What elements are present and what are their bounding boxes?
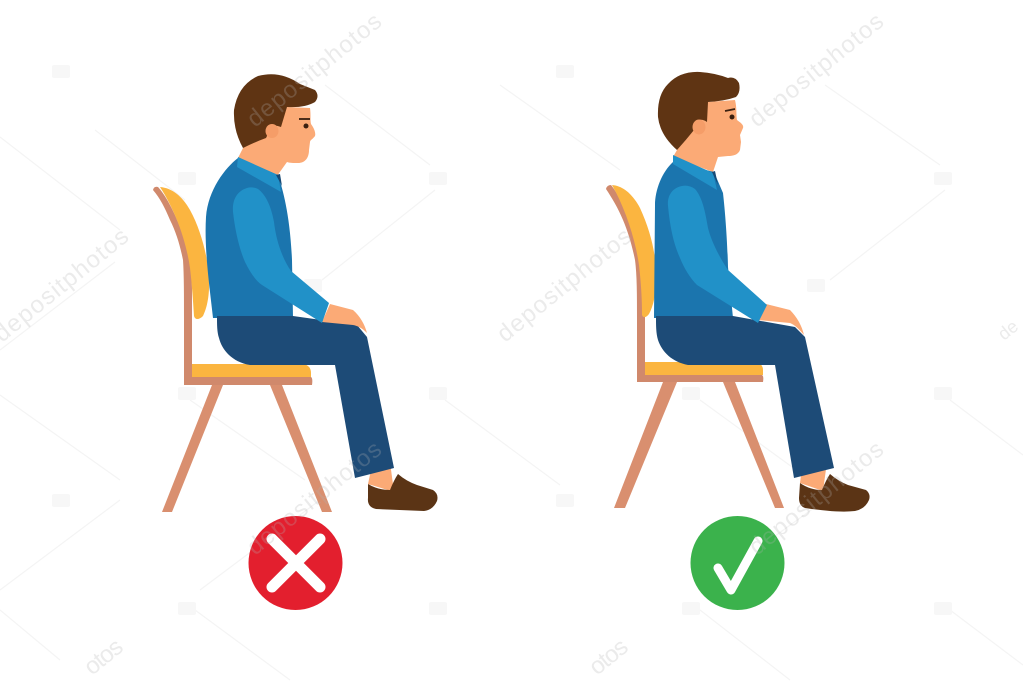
- stock watermark text: de: [994, 316, 1022, 344]
- stock watermark text: depositphotos: [744, 436, 889, 561]
- person: right: [654, 72, 870, 512]
- stock watermark text: otos: [79, 633, 128, 681]
- stock watermark text: depositphotos: [242, 436, 387, 561]
- stock watermark text: depositphotos: [744, 8, 889, 133]
- chair: left: [153, 187, 332, 512]
- stock watermark text: otos: [584, 633, 633, 681]
- figure: correct posture, upright on chair: [606, 72, 870, 512]
- stock watermark text: depositphotos: [242, 8, 387, 133]
- person: left: [206, 74, 438, 511]
- figure: incorrect posture, slouching on chair: [153, 74, 438, 512]
- stock watermark text: depositphotos: [492, 223, 637, 348]
- icon: green check badge: [690, 516, 784, 610]
- icon: red cross badge: [248, 516, 342, 610]
- chair: right: [606, 185, 784, 508]
